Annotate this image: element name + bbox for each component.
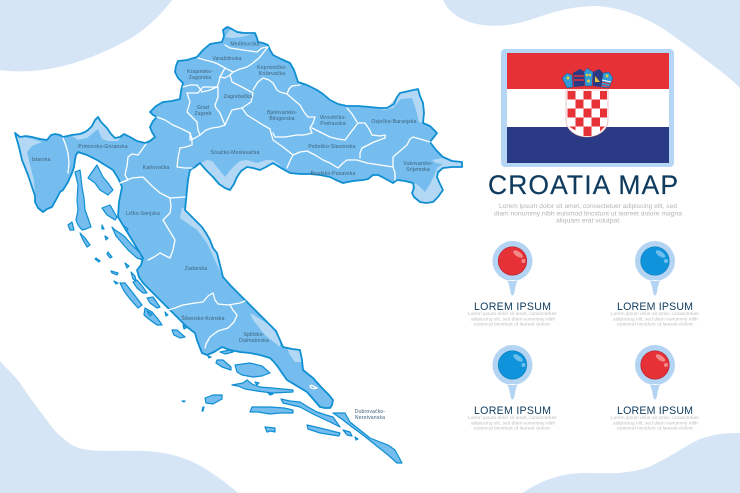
county labels: Krapinsko-	[187, 69, 213, 75]
mainland coastline	[15, 27, 462, 408]
county labels: Zagorska	[189, 75, 211, 81]
light shaded relief areas	[17, 30, 462, 362]
text block: top right: LOREM IPSUM	[617, 301, 693, 313]
description text: aliquam erat volutpat.	[556, 218, 621, 224]
text block: bottom left: euismod tincidunt ut laoreet dolore	[474, 426, 551, 431]
text block: bottom right	[611, 405, 700, 431]
flag stripes	[507, 53, 669, 163]
county boundaries	[63, 45, 430, 389]
background blob: top left	[0, 0, 172, 71]
county labels: Karlovačka	[143, 165, 169, 171]
county labels: Osječko-Baranjska	[371, 119, 417, 125]
text block: top left: euismod tincidunt ut laoreet dolore	[474, 322, 551, 327]
county labels: Grad	[197, 105, 209, 111]
county labels: Vukovarsko-	[403, 161, 433, 167]
text block: bottom left: Lorem ipsum dolor sit amet, consectetuer	[468, 415, 558, 420]
mainland fill	[15, 27, 462, 408]
description text: Lorem ipsum dolor sit amet, consectetuer adipiscing elit, sed	[499, 203, 678, 210]
county labels: Varaždinska	[212, 56, 242, 62]
text block: bottom right: euismod tincidunt ut laoreet dolore	[617, 426, 694, 431]
pin: bottom left, blue	[492, 345, 532, 400]
map of Croatia	[15, 27, 462, 463]
pin: top right, blue	[635, 241, 675, 296]
text block: top left	[468, 301, 558, 327]
text block: bottom left: LOREM IPSUM	[474, 405, 551, 417]
county labels: Bjelovarsko-	[267, 110, 297, 116]
county labels: Sisačko-Moslavačka	[210, 150, 260, 156]
coat of arms crown	[562, 68, 613, 88]
county labels: Splitsko-	[244, 332, 265, 338]
flag of Croatia	[501, 49, 674, 167]
text block: top right: Lorem ipsum dolor sit amet, consectetuer	[611, 311, 700, 316]
county labels	[31, 42, 433, 421]
text block: bottom left	[468, 405, 558, 431]
text block: top right: euismod tincidunt ut laoreet dolore	[617, 322, 694, 327]
county labels: Požeško-Slavonska	[308, 144, 356, 150]
county labels: Zadarska	[185, 266, 207, 272]
text block: bottom right: LOREM IPSUM	[617, 405, 693, 417]
county labels: Dalmatinska	[239, 338, 269, 344]
county labels: Podravska	[320, 121, 346, 127]
description text	[494, 203, 683, 224]
background blob: top right	[443, 0, 740, 88]
background blob: bottom right	[522, 433, 740, 493]
county labels: Ličko-Senjska	[126, 211, 160, 217]
county labels: Koprivničko-	[257, 65, 287, 71]
county labels: Međimurska	[230, 42, 260, 48]
county labels: Virovitičko-	[320, 115, 346, 121]
pin: top left, red	[492, 241, 532, 296]
county labels: Bilogorska	[269, 116, 295, 122]
county labels: Istarska	[31, 157, 51, 163]
text block: top left: LOREM IPSUM	[474, 301, 551, 313]
county labels: Brodsko-Posavska	[311, 171, 355, 177]
text block: bottom left: adipiscing elit, sed diam nonummy nibh	[471, 420, 556, 425]
county labels: Srijemska	[406, 167, 430, 173]
coat of arms shield	[566, 90, 608, 137]
text block: top right	[611, 301, 700, 327]
county labels: Križevačka	[259, 71, 285, 77]
islands	[68, 165, 402, 463]
pin: bottom right, red	[635, 345, 675, 400]
county labels: Šibensko-Kninska	[181, 315, 225, 322]
text block: top right: adipiscing elit, sed diam nonummy nibh	[613, 316, 699, 321]
county labels: Zagrebačka	[224, 94, 252, 100]
county labels: Primorsko-Goranska	[78, 144, 128, 150]
title: CROATIA MAP	[488, 170, 678, 200]
county labels: Zagreb	[194, 111, 212, 117]
text block: top left: adipiscing elit, sed diam nonummy nibh	[471, 316, 556, 321]
county labels: Dubrovačko-	[355, 409, 385, 415]
description text: diam nonummy nibh euismod tincidunt ut laoreet dolore magna	[494, 210, 683, 218]
flag frame	[501, 49, 674, 167]
text block: top left: Lorem ipsum dolor sit amet, consectetuer	[468, 311, 558, 316]
text block: bottom right: Lorem ipsum dolor sit amet, consectetuer	[611, 415, 700, 420]
county labels: Neretvanska	[355, 415, 385, 421]
background blob: bottom left	[0, 361, 238, 493]
text block: bottom right: adipiscing elit, sed diam nonummy nibh	[613, 420, 699, 425]
